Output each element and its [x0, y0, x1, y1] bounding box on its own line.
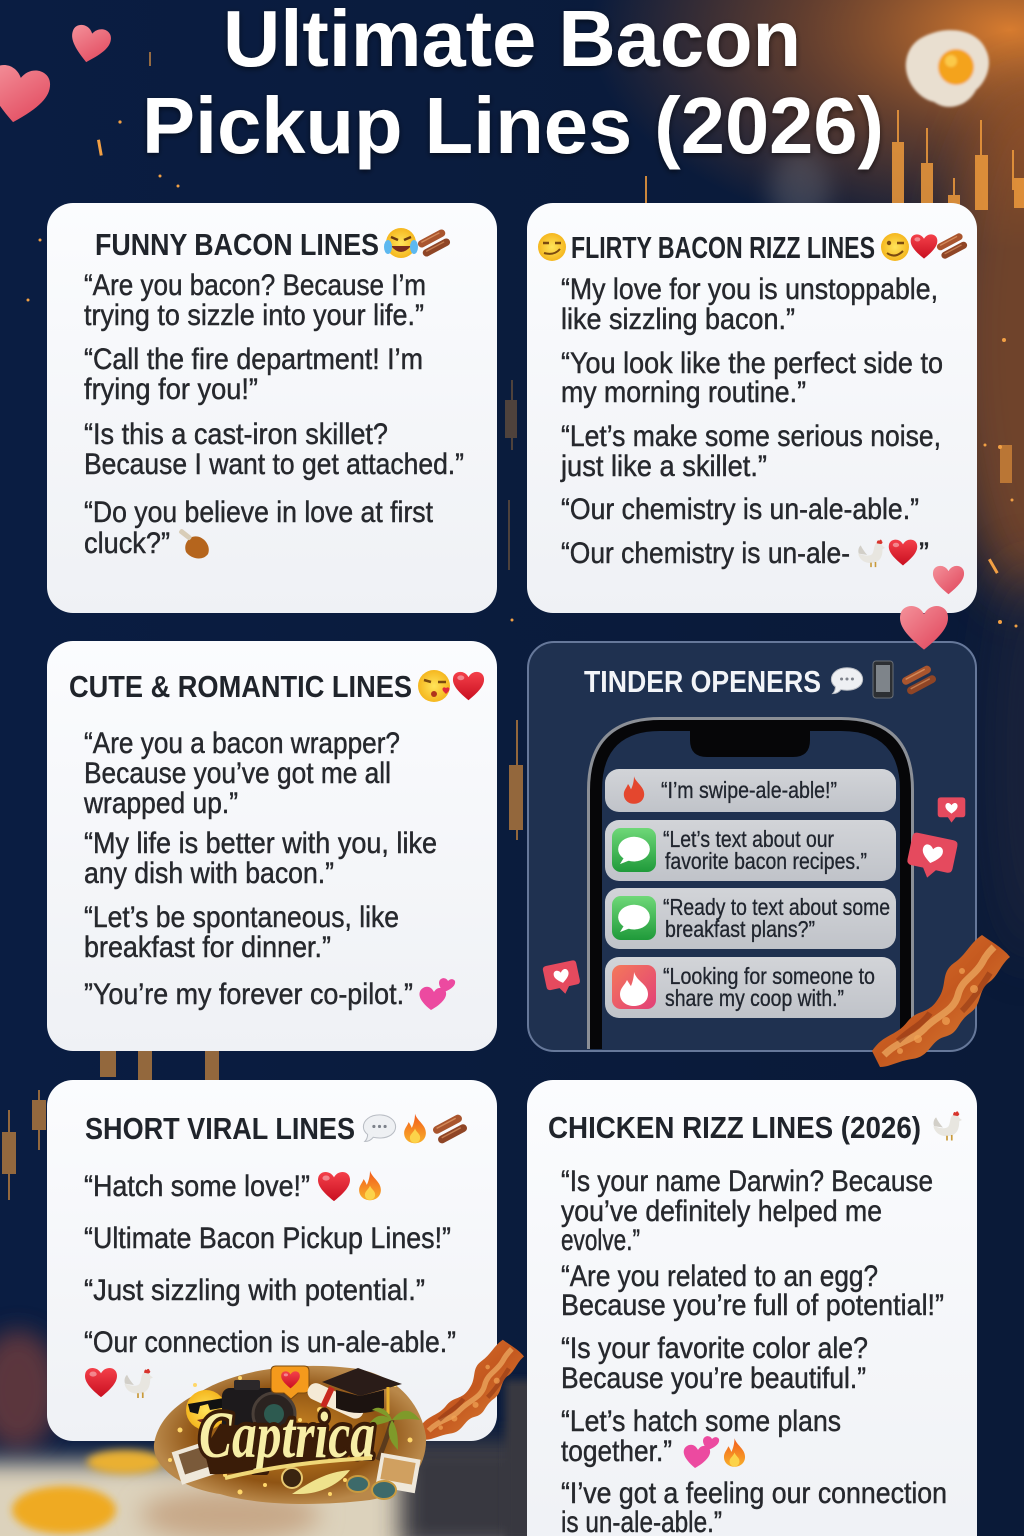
text: flirty lines: “Let’s make some serious noise,: [561, 420, 941, 453]
row: share my coop: “Looking for someone to: [663, 963, 875, 989]
panel: flirty bacon rizz lines: [527, 203, 977, 613]
text: funny lines: “Is this a cast-iron skillet?: [84, 418, 388, 451]
heading: flirty bacon rizz lines: FLIRTY BACON RIZZ LINES: [571, 230, 875, 265]
icon: chicken: [858, 540, 885, 567]
text: funny lines: frying for you!”: [84, 373, 258, 406]
icon: sunglasses emoji: [186, 1390, 226, 1430]
icon: red heart: [889, 540, 917, 565]
text: chicken lines: “Are you related to an egg?: [561, 1260, 878, 1293]
title: Pickup Lines (2026): [142, 81, 884, 170]
icon: fried egg: [906, 30, 989, 107]
text: funny lines: cluck?”: [84, 527, 170, 560]
text: viral lines: “Just sizzling with potential.”: [84, 1274, 425, 1307]
icon: red heart: [453, 672, 484, 700]
icon: bacon sausage: [901, 664, 937, 696]
icon: two pink hearts: [684, 1436, 719, 1468]
icon: red heart: [911, 234, 937, 259]
icon: kiss emoji: [418, 670, 450, 702]
text: flirty lines: just like a skillet.”: [560, 450, 767, 483]
text: viral lines: “Hatch some love!”: [84, 1170, 310, 1203]
text: chicken lines: Because you’re beautiful.”: [561, 1362, 866, 1395]
row: bacon recipes: favorite bacon recipes.”: [665, 848, 867, 874]
sparkles: [168, 1376, 412, 1496]
panel: chicken rizz lines: [527, 1080, 977, 1536]
text: flirty lines: “My love for you is unstoppable,: [561, 273, 938, 306]
icon: two pink hearts: [419, 978, 455, 1010]
text: chicken lines: “Is your name Darwin? Because: [561, 1165, 933, 1198]
icon: photos: [172, 1441, 421, 1493]
row: share my coop: [605, 957, 896, 1018]
icon: bacon sausage: [432, 1113, 468, 1145]
text: romantic lines: “Let’s be spontaneous, like: [84, 901, 399, 934]
icon: red heart: [318, 1172, 350, 1201]
text: chicken lines: you’ve definitely helped me: [561, 1195, 882, 1228]
heart: top left small: [67, 23, 113, 66]
text: romantic lines: breakfast for dinner.”: [84, 931, 331, 964]
heart: card corner small: [933, 566, 964, 594]
text: flirty lines: [560, 273, 943, 570]
icon: bacon strip left: [420, 1340, 524, 1440]
text: flirty lines: “You look like the perfect side to: [561, 347, 943, 380]
icon: bacon strip right: [872, 935, 1010, 1067]
icon: speech bubble: [363, 1115, 396, 1142]
text: chicken lines: evolve.”: [561, 1224, 640, 1257]
icon: chicken: [933, 1111, 962, 1140]
row: breakfast plans: “Ready to text about some: [663, 894, 890, 920]
row: breakfast plans: [605, 888, 896, 949]
text: funny lines: “Do you believe in love at first: [84, 496, 434, 529]
text: funny lines: trying to sizzle into your life.”: [84, 299, 424, 332]
row: bacon recipes: “Let’s text about our: [663, 826, 834, 852]
panel: tinder openers: [528, 642, 976, 1051]
text: chicken lines: “I’ve got a feeling our connection: [561, 1477, 947, 1510]
phone: [587, 717, 914, 1049]
icon: laughing emoji: [384, 228, 418, 258]
phone notch: [690, 730, 810, 757]
icon: phone: [873, 661, 893, 698]
text: chicken lines: [561, 1165, 947, 1536]
text: funny lines: [84, 269, 464, 560]
heart: top left large: [0, 63, 52, 127]
sparks: [26, 52, 1018, 628]
wordmark backing: [204, 1424, 374, 1474]
icon: sunglasses: [347, 1476, 396, 1499]
icon: shutter and feather: [225, 1458, 372, 1494]
text: flirty lines: my morning routine.”: [561, 376, 806, 409]
text: flirty lines: “Our chemistry is un-ale-able.”: [561, 493, 919, 526]
text: chicken lines: “Is your favorite color ale?: [561, 1332, 868, 1365]
text: viral lines: “Our connection is un-ale-able.”: [84, 1326, 456, 1359]
heading: chicken rizz lines: CHICKEN RIZZ LINES (2026): [548, 1110, 921, 1145]
text: chicken lines: together.”: [561, 1435, 672, 1468]
text: romantic lines: ”You’re my forever co-pilot.”: [84, 978, 413, 1011]
panel: funny bacon lines: [47, 203, 497, 613]
icon: smirk emoji: [538, 233, 566, 261]
icon: speech bubble: [831, 668, 863, 694]
heart: large overlapping: [900, 606, 948, 650]
row: share my coop: share my coop with.”: [665, 985, 844, 1011]
icon: wink emoji: [881, 233, 909, 261]
icon: camera: [222, 1380, 295, 1435]
icon: bacon sausage: [417, 228, 451, 258]
icon: graduation cap: [322, 1368, 402, 1414]
text: romantic lines: [83, 727, 437, 1011]
heading: cute and romantic lines: CUTE & ROMANTIC LINES: [69, 669, 412, 704]
icon: red heart: [85, 1368, 117, 1397]
logo wordmark: Captrica: [199, 1399, 375, 1472]
row: swipe-ale-able: “I’m swipe-ale-able!”: [661, 777, 837, 803]
icon: fire: [724, 1438, 745, 1467]
row: swipe-ale-able: [605, 769, 896, 812]
icon: heart chat bubble: [271, 1366, 309, 1399]
text: flirty lines: ”: [919, 537, 929, 570]
text: funny lines: Because I want to get attached.”: [84, 448, 464, 481]
text: romantic lines: Because you’ve got me all: [84, 757, 391, 790]
heading: tinder openers: TINDER OPENERS: [584, 664, 821, 699]
text: romantic lines: wrapped up.”: [83, 787, 238, 820]
row: breakfast plans: breakfast plans?”: [665, 916, 815, 942]
text: chicken lines: Because you’re full of potential!”: [561, 1289, 944, 1322]
text: romantic lines: “Are you a bacon wrapper?: [84, 727, 400, 760]
icon: fire: [359, 1171, 381, 1200]
icon: bacon sausage: [936, 232, 968, 260]
text: viral lines: [84, 1170, 456, 1359]
text: chicken lines: “Let’s hatch some plans: [561, 1405, 841, 1438]
icon: like bubble medium: [905, 832, 958, 882]
icon: chicken: [124, 1369, 153, 1398]
icon: palm tree: [366, 1408, 420, 1460]
icon: diploma: [304, 1379, 367, 1423]
text: viral lines: “Ultimate Bacon Pickup Lines!”: [84, 1222, 451, 1255]
text: romantic lines: “My life is better with you, like: [84, 827, 437, 860]
icon: drumstick: [178, 528, 209, 558]
panel: short viral lines: [47, 1080, 497, 1441]
icon: fire: [404, 1114, 426, 1143]
heading: funny bacon lines: FUNNY BACON LINES: [95, 227, 379, 262]
logo: Captrica badge: [154, 1366, 426, 1504]
heading: short viral lines: SHORT VIRAL LINES: [85, 1111, 355, 1146]
text: funny lines: “Are you bacon? Because I’m: [84, 269, 426, 302]
row: bacon recipes: [605, 820, 896, 881]
text: funny lines: “Call the fire department! I’m: [84, 343, 423, 376]
text: flirty lines: “Our chemistry is un-ale-: [561, 537, 850, 570]
icon: like bubble small: [938, 797, 965, 823]
candlestick chart motif: [2, 110, 1024, 1200]
text: romantic lines: any dish with bacon.”: [84, 857, 334, 890]
panel: cute and romantic lines: [47, 641, 497, 1051]
icon: like bubble left: [542, 960, 582, 997]
text: flirty lines: like sizzling bacon.”: [561, 303, 795, 336]
title: [142, 0, 884, 170]
